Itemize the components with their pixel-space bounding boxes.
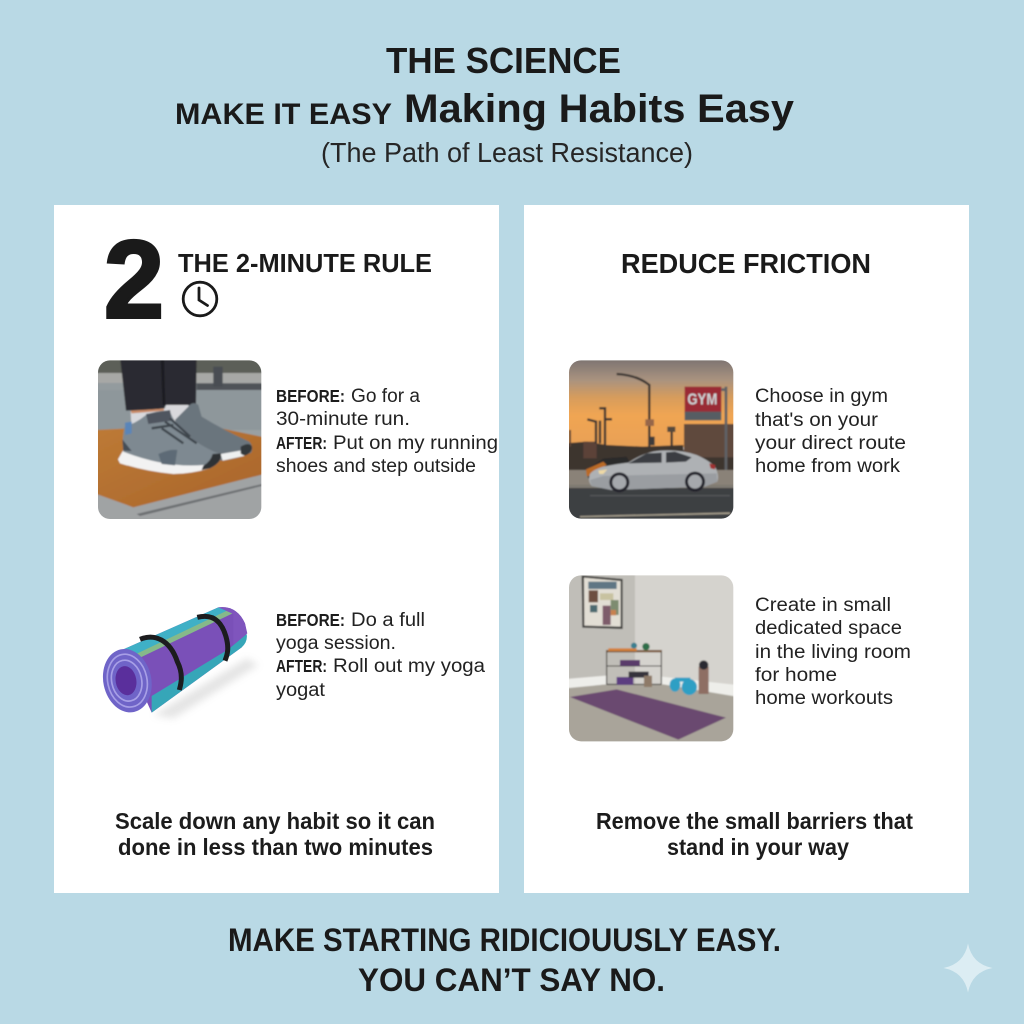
text: dedicated workout space: in the living room: [755, 642, 911, 663]
text: gym on route: Choose in gym: [755, 386, 888, 407]
text: yoga before and after: AFTER:: [276, 656, 327, 676]
panel: reduce friction: [524, 205, 969, 893]
photo: car passing gym at sunset: GYM: [687, 392, 717, 409]
panel background right: [524, 205, 969, 893]
text: yoga before and after: BEFORE:: [276, 610, 345, 630]
closing message: YOU CAN’T SAY NO.: [358, 962, 665, 998]
title line: Make it easy: MAKE IT EASY: [175, 98, 392, 131]
caption: scale down any habit: Scale down any habit so it can: [115, 808, 435, 834]
photo: running shoes on doormat: [95, 357, 265, 522]
text: dedicated workout space: Create in small: [755, 595, 891, 616]
text: shoes before and after: Go for a: [351, 386, 420, 407]
text: yoga before and after: Roll out my yoga: [333, 656, 485, 677]
panel: the 2-minute rule: [54, 205, 499, 893]
closing message: MAKE STARTING RIDICIOUUSLY EASY.: [228, 922, 781, 958]
icon: sparkle: [944, 944, 992, 992]
caption: remove the small barriers: [596, 808, 913, 860]
green stripe: [134, 610, 233, 657]
text: yoga before and after: yogat: [276, 680, 326, 701]
text: shoes before and after: AFTER:: [276, 433, 327, 453]
text: dedicated workout space: dedicated space: [755, 618, 902, 639]
photo: car passing gym at sunset: [566, 357, 737, 522]
caption: scale down any habit: done in less than two minutes: [118, 834, 433, 860]
text: shoes before and after: 30-minute run.: [276, 409, 410, 430]
heading: the 2-minute rule: THE 2-MINUTE RULE: [178, 248, 432, 278]
text: gym on route: that's on your: [755, 410, 879, 431]
subtitle: (The Path of Least Resistance): [321, 137, 693, 168]
text: gym on route: your direct route: [755, 433, 906, 454]
text: dedicated workout space: for home: [755, 665, 837, 686]
caption: remove the small barriers: Remove the small barriers that: [596, 808, 913, 834]
upper teal band: [123, 607, 233, 657]
text: dedicated workout space: home workouts: [755, 688, 893, 709]
lower teal band: [152, 634, 247, 713]
text: shoes before and after: Put on my running: [333, 433, 498, 454]
title line: The Science: THE SCIENCE: [386, 40, 621, 81]
mat body: [123, 607, 246, 713]
text: shoes before and after: shoes and step outside: [276, 456, 476, 477]
title block: [175, 40, 795, 168]
icon: clock: [183, 282, 217, 316]
text: gym on route: home from work: [755, 456, 901, 477]
text: shoes before and after: BEFORE:: [276, 386, 345, 406]
text: dedicated workout space: [755, 595, 911, 709]
title line: Making Habits Easy: Making Habits Easy: [404, 87, 795, 131]
panel background left: [54, 205, 499, 893]
heading: reduce friction: REDUCE FRICTION: [621, 248, 871, 279]
text: yoga before and after: yoga session.: [276, 633, 396, 654]
photo: rolled yoga mat: [97, 607, 258, 718]
text: yoga before and after: Do a full: [351, 610, 425, 631]
photo: home workout corner: [566, 572, 737, 745]
text: shoes before and after: [276, 386, 498, 477]
caption: remove the small barriers: stand in your way: [667, 834, 849, 860]
text: gym on route: [755, 386, 906, 477]
big numeral 2: 2: [104, 218, 164, 342]
text: yoga before and after: [276, 610, 485, 701]
caption: scale down any habit: [115, 808, 435, 860]
closing message: [228, 922, 781, 998]
